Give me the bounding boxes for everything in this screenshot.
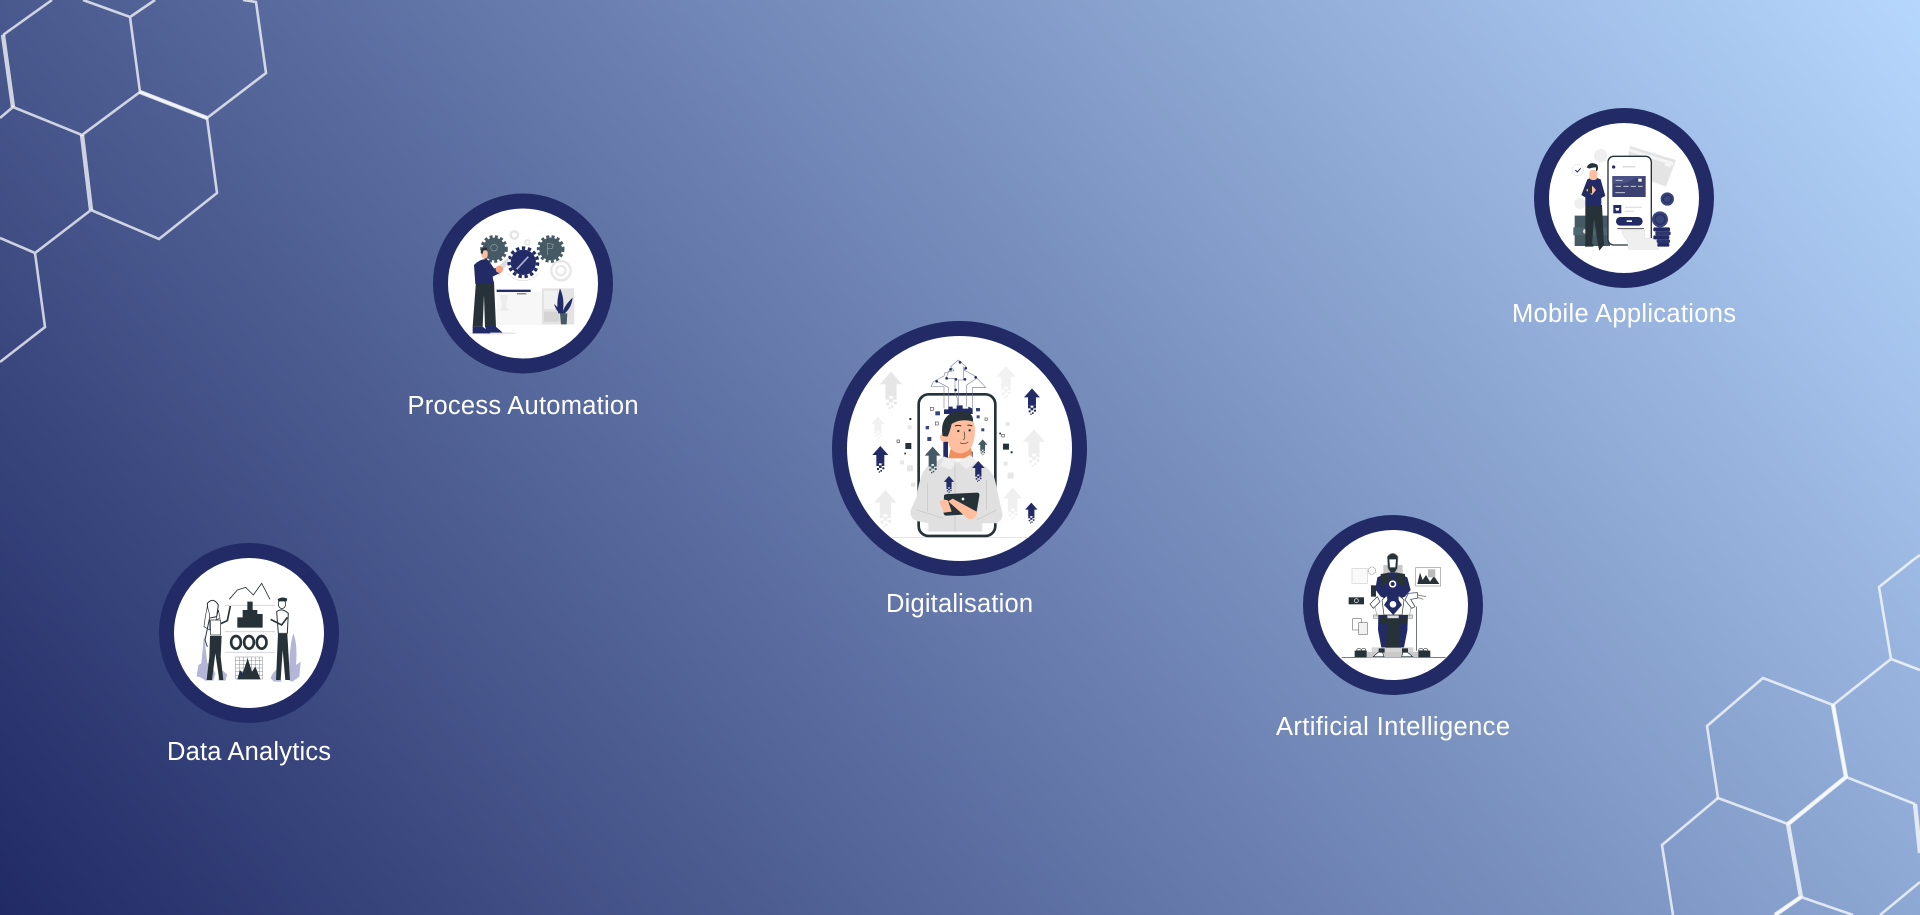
panel: process automation bbox=[408, 201, 638, 420]
ring: artificial intelligence bbox=[1310, 522, 1476, 688]
decoration: hexagon pattern top-left bbox=[0, 0, 266, 362]
illustration: man with mobile banking app bbox=[1572, 146, 1676, 251]
arrows: light grey bbox=[871, 366, 1045, 527]
ring: process automation bbox=[440, 201, 606, 366]
arrows: navy side bbox=[872, 388, 1040, 523]
panel: mobile applications bbox=[1512, 116, 1736, 328]
ring: digitalisation bbox=[840, 328, 1080, 568]
ring: mobile applications bbox=[1542, 116, 1706, 280]
panel: data analytics bbox=[166, 550, 332, 766]
decoration: hexagon pattern bottom-right bbox=[1662, 555, 1920, 915]
label: mobile applications: Mobile Applications bbox=[1512, 300, 1736, 328]
ring: data analytics bbox=[166, 550, 332, 716]
person bbox=[948, 442, 973, 458]
circuit arrow bbox=[931, 360, 986, 408]
illustration: robot on throne bbox=[1342, 553, 1446, 657]
label: digitalisation: Digitalisation bbox=[886, 590, 1033, 618]
illustration: analysts with charts bbox=[197, 583, 301, 682]
illustration: engineer with gears bbox=[470, 231, 575, 335]
panel: artificial intelligence bbox=[1276, 522, 1510, 741]
label: artificial intelligence: Artificial Intelligence bbox=[1276, 713, 1510, 741]
phone frame bbox=[919, 394, 995, 536]
illustration: man with tablet and upward arrows bbox=[871, 360, 1045, 538]
label: data analytics: Data Analytics bbox=[167, 738, 331, 766]
label: process automation: Process Automation bbox=[408, 392, 638, 420]
panel: digitalisation bbox=[840, 328, 1080, 618]
